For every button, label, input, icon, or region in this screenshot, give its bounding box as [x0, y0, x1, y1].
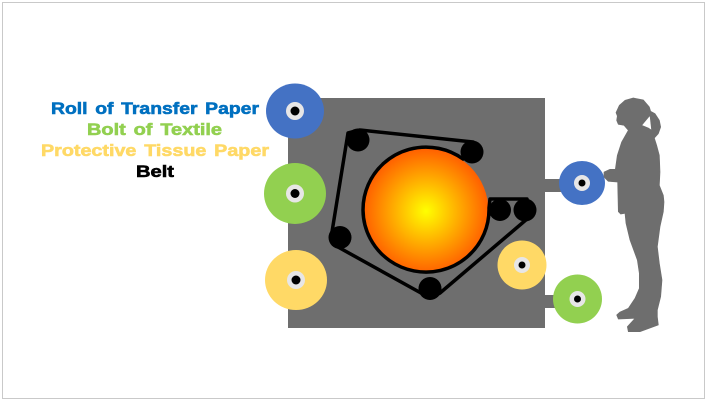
operator silhouette	[604, 98, 664, 332]
rollers	[328, 128, 536, 300]
roll: textile supply	[264, 163, 326, 224]
heated drum	[364, 148, 488, 274]
legend: protective tissue paper: Protective Tissue Paper	[41, 141, 269, 160]
legend: belt: Belt	[136, 162, 174, 181]
roll: printed textile take-up	[553, 274, 602, 324]
roll: transfer paper supply	[266, 84, 324, 138]
machine body	[288, 98, 563, 328]
roll: transfer paper take-up	[559, 161, 605, 205]
roll: tissue paper take-up	[498, 240, 546, 290]
legend: roll of transfer paper: Roll of Transfer Paper	[51, 99, 259, 118]
legend	[41, 99, 269, 181]
belt and rollers	[328, 128, 536, 300]
belt	[331, 130, 527, 298]
roll: tissue paper supply	[265, 250, 327, 310]
legend: bolt of textile: Bolt of Textile	[87, 120, 222, 139]
